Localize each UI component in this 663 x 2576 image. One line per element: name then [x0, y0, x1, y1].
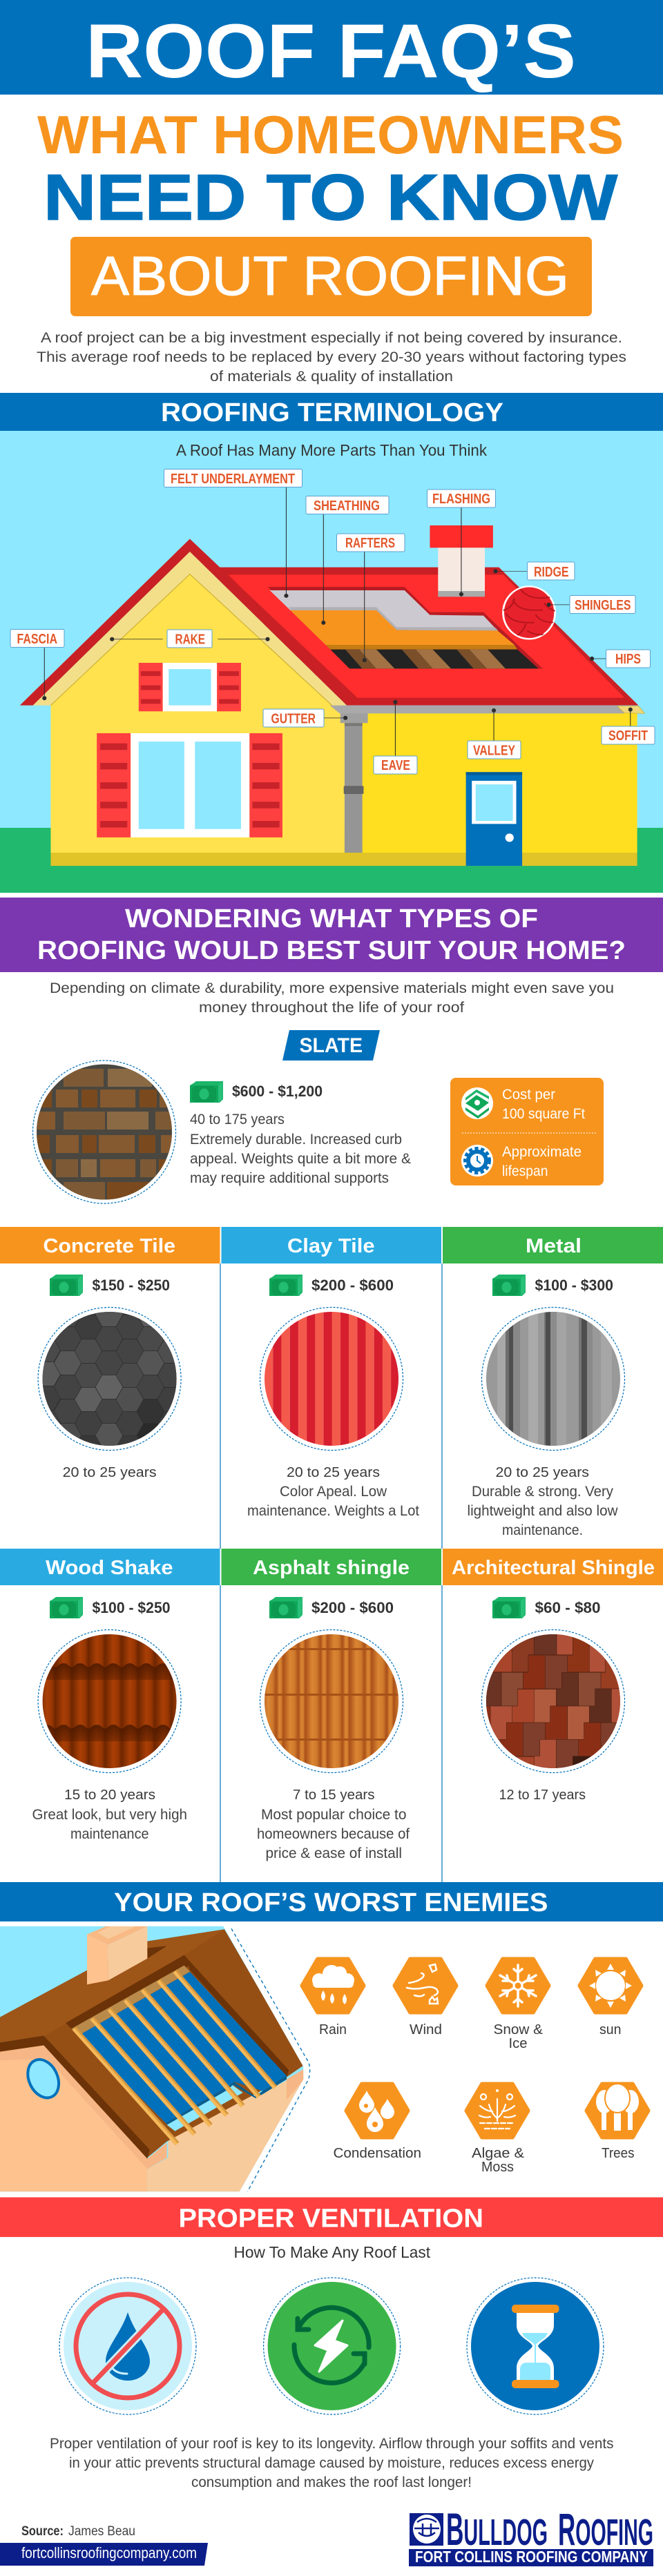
card: concrete tile: Concrete Tile	[43, 1235, 175, 1257]
card: architectural shingle	[443, 1549, 663, 1803]
card: clay tile: $200 - $600	[311, 1277, 394, 1294]
logo: bulldog roofing: BULLDOG	[446, 2504, 548, 2555]
heading: proper ventilation	[0, 2197, 663, 2237]
title: ROOF FAQ’S	[86, 9, 576, 94]
logo mark	[410, 2513, 443, 2546]
roof cutaway	[218, 525, 644, 713]
heading: types of roofing	[0, 898, 663, 972]
card: clay tile: maintenance. Weights a Lot	[247, 1503, 419, 1519]
enemy: rain	[302, 1959, 363, 2037]
label text: RAKE	[175, 632, 205, 648]
gable	[20, 539, 357, 706]
enemy: sun: sun	[599, 2022, 622, 2037]
card: asphalt shingle: $200 - $600	[311, 1599, 394, 1616]
illustration: roof rafters	[0, 1923, 323, 2194]
card: architectural shingle: Architectural Shingle	[452, 1557, 655, 1579]
intro text: This average roof needs to be replaced by every 20-30 years without factoring types	[37, 349, 626, 365]
intro text	[37, 330, 626, 385]
enemy: algae and moss	[467, 2084, 528, 2175]
slate details: Extremely durable. Increased curb	[190, 1132, 402, 1147]
website bar: fortcollinsroofingcompany.com	[21, 2544, 197, 2562]
enemy: snow and ice: Ice	[508, 2036, 528, 2051]
card: metal: maintenance.	[502, 1522, 583, 1538]
legend box: Approximate	[502, 1144, 582, 1160]
slate details: $600 - $1,200	[232, 1083, 323, 1100]
texture: slate	[33, 1061, 175, 1203]
icon: no moisture	[59, 2278, 196, 2414]
enemy: condensation: Condensation	[333, 2146, 421, 2161]
house walls and windows	[50, 574, 637, 866]
ventilation text	[50, 2436, 613, 2490]
card: wood shake: Great look, but very high	[32, 1807, 187, 1823]
enemy: algae and moss: Moss	[481, 2160, 514, 2175]
types intro text	[50, 980, 614, 1016]
card: architectural shingle: $60 - $80	[535, 1599, 601, 1616]
banner: about roofing: ABOUT ROOFING	[91, 245, 569, 307]
card: metal	[443, 1227, 663, 1538]
card: metal: lightweight and also low	[467, 1503, 618, 1519]
subtitle: what homeowners: WHAT HOMEOWNERS	[37, 104, 624, 165]
heading: roofing terminology: ROOFING TERMINOLOGY	[161, 398, 503, 427]
icon: cost per area	[461, 1087, 493, 1119]
intro text: of materials & quality of installation	[210, 369, 453, 385]
label text: FASCIA	[17, 632, 57, 647]
heading: types of roofing: WONDERING WHAT TYPES OF	[125, 904, 538, 933]
card: clay tile: Clay Tile	[287, 1235, 374, 1257]
heading: types of roofing: ROOFING WOULD BEST SUIT YOUR HOME?	[37, 936, 626, 965]
labels	[10, 469, 655, 774]
badge: slate	[282, 1030, 380, 1061]
enemy: wind: Wind	[410, 2022, 442, 2037]
card: asphalt shingle: Most popular choice to	[261, 1807, 406, 1823]
card: clay tile: 20 to 25 years	[287, 1465, 380, 1480]
card: wood shake: maintenance	[70, 1826, 149, 1842]
card: metal: $100 - $300	[535, 1277, 613, 1294]
card: clay tile	[221, 1227, 441, 1519]
legend box	[450, 1078, 604, 1185]
enemy: trees	[587, 2084, 648, 2161]
card: metal: 20 to 25 years	[496, 1465, 589, 1480]
label text: SOFFIT	[608, 728, 648, 744]
legend box: Cost per	[502, 1087, 555, 1103]
card: concrete tile: $150 - $250	[93, 1277, 170, 1294]
ventilation text: Proper ventilation of your roof is key to its longevity. Airflow through your soffits and vents	[50, 2436, 613, 2452]
ventilation subheading: How To Make Any Roof Last	[233, 2243, 431, 2261]
ventilation text: in your attic prevents structural damage caused by moisture, reduces excess energy	[69, 2455, 594, 2471]
panel: title header	[0, 0, 663, 95]
card: metal: Durable & strong. Very	[472, 1484, 613, 1500]
icon: money	[190, 1081, 223, 1103]
label text: FLASHING	[432, 492, 490, 507]
intro text: A roof project can be a big investment especially if not being covered by insurance.	[41, 330, 622, 346]
card: asphalt shingle: Asphalt shingle	[253, 1557, 410, 1579]
enemy: trees: Trees	[602, 2146, 634, 2161]
source credit: James Beau	[68, 2524, 135, 2539]
heading: worst enemies	[0, 1882, 663, 1921]
source credit	[21, 2524, 135, 2539]
enemy: snow and ice	[488, 1959, 548, 2051]
slate details: 40 to 175 years	[190, 1112, 285, 1127]
label text: SHINGLES	[575, 598, 631, 613]
enemy: condensation	[333, 2084, 421, 2161]
label text: SHEATHING	[314, 498, 380, 514]
source credit: Source:	[21, 2524, 64, 2539]
types intro text: Depending on climate & durability, more expensive materials might even save you	[50, 980, 614, 996]
card: asphalt shingle: price & ease of install	[265, 1846, 402, 1861]
icon: hourglass longevity	[467, 2278, 604, 2414]
ventilation text: consumption and makes the roof last longer!	[191, 2475, 472, 2490]
legend box: 100 square Ft	[502, 1106, 585, 1122]
icon: lifespan gear	[461, 1145, 493, 1176]
card: asphalt shingle	[221, 1549, 441, 1861]
heading: roofing terminology	[0, 393, 663, 431]
enemy: rain: Rain	[319, 2022, 347, 2037]
card: asphalt shingle: homeowners because of	[257, 1826, 410, 1842]
card: concrete tile	[0, 1227, 220, 1480]
heading: proper ventilation: PROPER VENTILATION	[178, 2204, 483, 2233]
legend box: lifespan	[502, 1163, 548, 1179]
website bar	[0, 2543, 208, 2566]
enemy: sun	[580, 1959, 641, 2037]
label text: EAVE	[381, 758, 410, 773]
label text: HIPS	[615, 652, 641, 667]
slate details	[190, 1081, 411, 1186]
subtitle: need to know: NEED TO KNOW	[44, 161, 617, 233]
slate details: may require additional supports	[190, 1170, 389, 1186]
card: asphalt shingle: 7 to 15 years	[293, 1788, 374, 1803]
card: architectural shingle: 12 to 17 years	[499, 1788, 586, 1803]
label text	[17, 472, 648, 773]
badge: slate: SLATE	[300, 1034, 363, 1057]
banner: about roofing	[70, 237, 592, 316]
label text: RAFTERS	[345, 536, 395, 551]
logo: bulldog roofing	[409, 2504, 653, 2566]
heading: worst enemies: YOUR ROOF’S WORST ENEMIES	[114, 1888, 548, 1917]
leader lines	[42, 487, 633, 756]
icon: energy savings	[264, 2278, 401, 2414]
enemy: algae and moss: Algae &	[472, 2146, 525, 2161]
house subheading: A Roof Has Many More Parts Than You Think	[176, 441, 487, 459]
card: wood shake: Wood Shake	[46, 1557, 173, 1579]
types intro text: money throughout the life of your roof	[199, 1000, 464, 1016]
enemy: wind	[395, 1959, 456, 2037]
label text: FELT UNDERLAYMENT	[171, 472, 295, 487]
label text: VALLEY	[473, 743, 516, 758]
panel: house diagram	[0, 431, 663, 893]
label text: RIDGE	[534, 565, 569, 580]
enemy: snow and ice: Snow &	[493, 2022, 544, 2037]
card: metal: Metal	[526, 1235, 582, 1257]
card: concrete tile: 20 to 25 years	[63, 1465, 157, 1480]
slate details: appeal. Weights quite a bit more &	[190, 1151, 411, 1167]
card: clay tile: Color Apeal. Low	[280, 1484, 387, 1500]
card: wood shake	[0, 1549, 220, 1842]
card: wood shake: 15 to 20 years	[64, 1788, 155, 1803]
label text: GUTTER	[271, 711, 316, 726]
card: wood shake: $100 - $250	[93, 1599, 170, 1616]
